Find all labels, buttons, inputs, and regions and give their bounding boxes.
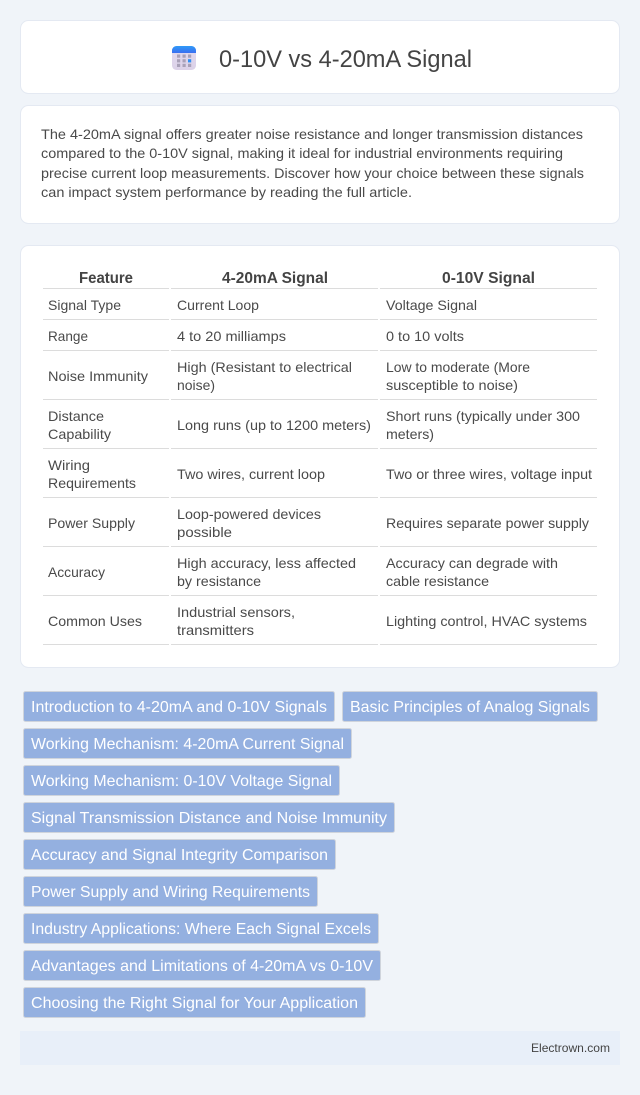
chip: current signal: Working Mechanism: 4-20mA Current Signal (31, 736, 344, 753)
row: range (48, 328, 464, 344)
chip: industry applications: Industry Applications: Where Each Signal Excels (31, 921, 371, 938)
table grid lines (43, 288, 597, 644)
row: wiring requirements: Wiring (48, 457, 90, 473)
table header: Feature (79, 270, 133, 287)
chip: current signal (24, 728, 352, 758)
row: noise immunity: susceptible to noise) (386, 377, 518, 393)
chip: accuracy: Accuracy and Signal Integrity Comparison (31, 847, 328, 864)
chip: power and wiring: Power Supply and Wiring Requirements (31, 884, 310, 901)
chip: introduction (24, 692, 334, 722)
row: range: Range (48, 328, 88, 344)
row: signal type: Signal Type (48, 297, 121, 313)
row: power supply: Loop-powered devices (177, 506, 321, 522)
row: power supply (48, 506, 589, 540)
chip: power and wiring (24, 876, 318, 906)
row: common uses: Industrial sensors, (177, 604, 295, 620)
chip: choosing: Choosing the Right Signal for Your Application (31, 995, 358, 1012)
row: wiring requirements (48, 457, 592, 491)
row: noise immunity: noise) (177, 377, 215, 393)
chip: choosing (24, 988, 366, 1018)
panel: comparison table (20, 246, 620, 668)
row: distance capability (48, 408, 580, 442)
row: signal type (48, 297, 477, 313)
row: distance capability: meters) (386, 426, 434, 442)
row: accuracy: cable resistance (386, 573, 489, 589)
row: signal type: Current Loop (177, 297, 259, 313)
intro paragraph: compared to the 0-10V signal, making it ideal for industrial environments requiring (41, 145, 563, 161)
intro paragraph: can impact system performance by reading the full article. (41, 184, 412, 200)
row: range: 0 to 10 volts (386, 328, 464, 344)
chip: basic principles: Basic Principles of Analog Signals (350, 699, 590, 716)
row: wiring requirements: Two or three wires, voltage input (386, 466, 592, 482)
row: common uses: Lighting control, HVAC systems (386, 613, 587, 629)
row: noise immunity: Noise Immunity (48, 368, 148, 384)
icon: calendar (172, 46, 196, 70)
chip: voltage signal (24, 766, 340, 796)
row: signal type: Voltage Signal (386, 297, 477, 313)
footer: Electrown.com (531, 1041, 610, 1055)
row: distance capability: Capability (48, 426, 111, 442)
chip: voltage signal: Working Mechanism: 0-10V Voltage Signal (31, 773, 332, 790)
intro paragraph: The 4-20mA signal offers greater noise resistance and longer transmission distances (41, 126, 583, 142)
row: distance capability: Distance (48, 408, 104, 424)
row: power supply: Power Supply (48, 515, 135, 531)
chip: distance and noise (24, 802, 394, 832)
row: wiring requirements: Requirements (48, 475, 136, 491)
intro paragraph: precise current loop measurements. Discover how your choice between these signals (41, 165, 584, 181)
table header: 4-20mA Signal (222, 270, 328, 287)
chip: accuracy (24, 840, 336, 870)
row: range: 4 to 20 milliamps (177, 328, 286, 344)
chip: advantages: Advantages and Limitations of 4-20mA vs 0-10V (31, 958, 373, 975)
row: common uses: Common Uses (48, 613, 142, 629)
chip: advantages (24, 950, 380, 980)
intro paragraph (41, 126, 584, 200)
chip: distance and noise: Signal Transmission Distance and Noise Immunity (31, 810, 387, 827)
row: noise immunity: High (Resistant to electrical (177, 359, 352, 375)
row: power supply: Requires separate power supply (386, 515, 589, 531)
row: noise immunity: Low to moderate (More (386, 359, 530, 375)
row: power supply: possible (177, 524, 232, 540)
chip: introduction: Introduction to 4-20mA and 0-10V Signals (31, 699, 327, 716)
row: common uses (48, 604, 587, 638)
table header: 0-10V Signal (442, 270, 535, 287)
row: accuracy: Accuracy (48, 564, 105, 580)
chip: industry applications (24, 914, 378, 944)
row: accuracy: Accuracy can degrade with (386, 555, 558, 571)
row: accuracy (48, 555, 558, 589)
row: distance capability: Long runs (up to 1200 meters) (177, 417, 371, 433)
row: distance capability: Short runs (typically under 300 (386, 408, 580, 424)
row: common uses: transmitters (177, 622, 254, 638)
row: wiring requirements: Two wires, current loop (177, 466, 325, 482)
row: accuracy: High accuracy, less affected (177, 555, 356, 571)
row: accuracy: by resistance (177, 573, 261, 589)
footer (20, 1031, 620, 1065)
heading: 0-10V vs 4-20mA Signal (219, 46, 472, 73)
panel: intro text (20, 106, 620, 224)
table header (79, 270, 535, 287)
topic links (24, 692, 598, 1018)
panel: title (20, 20, 620, 94)
chip: basic principles (342, 692, 598, 722)
row: noise immunity (48, 359, 530, 393)
